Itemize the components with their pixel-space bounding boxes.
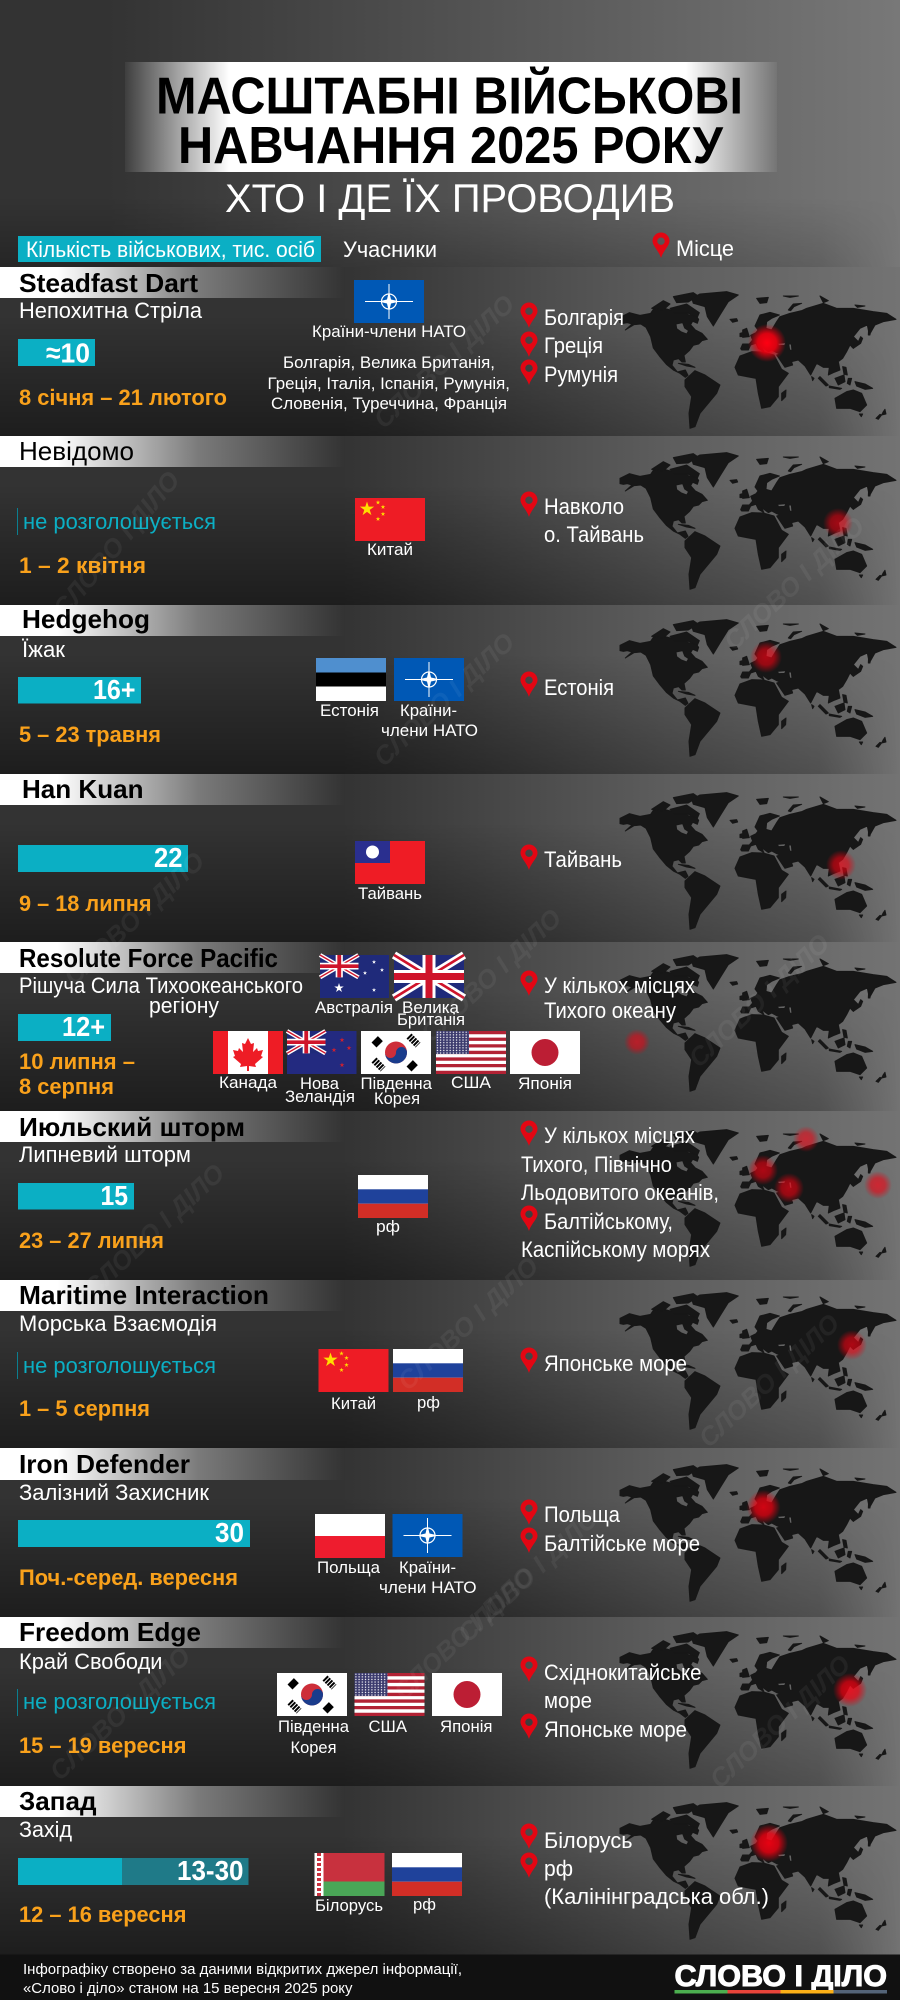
panel: Запад: Захід	[19, 1817, 72, 1842]
panel: Resolute Force Pacific: Японія	[518, 1075, 572, 1093]
watermarks: СЛОВО І ДІЛО	[682, 928, 835, 1073]
panel: Невідомо: Китай	[367, 541, 413, 559]
location: Тайвань	[544, 847, 622, 872]
panel: Maritime Interaction: рф	[417, 1394, 440, 1412]
locations	[520, 1500, 700, 1556]
flag: NATO	[354, 280, 424, 323]
flag: South Korea	[361, 1031, 431, 1074]
panel: Freedom Edge: Корея	[290, 1739, 336, 1757]
flag: Russia	[358, 1175, 428, 1218]
flag: United Kingdom	[394, 955, 464, 998]
footer: «Слово і діло» станом на 15 вересня 2025 року	[23, 1980, 353, 1997]
troop bar: 30	[215, 1517, 244, 1548]
locations: Греція	[544, 333, 603, 358]
panel: Iron Defender: Країни-	[399, 1559, 456, 1577]
world map	[620, 292, 896, 428]
heading: Resolute Force Pacific	[19, 943, 278, 973]
flag: Estonia	[316, 658, 386, 701]
locations: У кількох місцях	[544, 1123, 695, 1148]
flag: Poland	[315, 1514, 385, 1558]
heading: Freedom Edge	[19, 1617, 201, 1647]
panel: Steadfast Dart: 8 січня – 21 лютого	[19, 385, 227, 410]
locations: Білорусь	[544, 1828, 632, 1853]
panel: Maritime Interaction: 1 – 5 серпня	[19, 1396, 150, 1421]
watermarks: СЛОВО І ДІЛО	[57, 846, 210, 991]
location: Тихого океану	[544, 998, 676, 1023]
panel: Июльский шторм: 23 – 27 липня	[19, 1228, 164, 1253]
flag: Japan	[510, 1031, 580, 1074]
troop bar: 15	[100, 1180, 128, 1211]
flag: Australia	[320, 955, 389, 998]
watermarks: СЛОВО І ДІЛО	[391, 1251, 544, 1396]
world map	[620, 1293, 896, 1429]
world map	[620, 1126, 896, 1266]
locations	[520, 302, 624, 387]
watermarks	[43, 289, 870, 1794]
footer: Інфографіку створено за даними відкритих джерел інформації,	[23, 1961, 462, 1978]
world map	[620, 620, 896, 756]
watermarks: СЛОВО І ДІЛО	[414, 903, 567, 1048]
locations: Льодовитого океанів,	[521, 1180, 719, 1205]
troop bar	[18, 1517, 250, 1548]
troop bar	[18, 1855, 248, 1886]
panel: Hedgehog: члени НАТО	[381, 722, 478, 740]
world map	[620, 1632, 896, 1768]
panel: Невідомо: не розголошується	[23, 509, 216, 534]
location: Японське море	[544, 1351, 687, 1376]
panel: Resolute Force Pacific: Південна	[360, 1075, 433, 1093]
flag: Russia	[393, 1349, 463, 1392]
flag: Canada	[213, 1031, 283, 1074]
panel: Hedgehog	[0, 604, 896, 756]
locations	[520, 1120, 719, 1262]
panel: Freedom Edge: Край Свободи	[19, 1649, 162, 1674]
watermarks: СЛОВО І ДІЛО	[77, 1158, 230, 1303]
heading: Невідомо	[19, 436, 134, 466]
locations: Каспійському морях	[521, 1237, 710, 1262]
panel: Hedgehog: 5 – 23 травня	[19, 722, 161, 747]
flag: Taiwan	[355, 841, 425, 884]
flag: China	[318, 1349, 388, 1392]
legend: Місце	[676, 236, 734, 261]
panel: Han Kuan	[0, 774, 896, 929]
panel: Resolute Force Pacific: Канада	[219, 1074, 278, 1092]
watermarks: СЛОВО І ДІЛО	[717, 511, 870, 656]
troop bar	[18, 1180, 134, 1211]
locations: Японське море	[544, 1717, 687, 1742]
troop bar: 22	[154, 842, 182, 873]
panel: Steadfast Dart: Непохитна Стріла	[19, 298, 203, 323]
watermarks: СЛОВО І ДІЛО	[367, 627, 520, 772]
flag: China	[355, 498, 425, 541]
panel: Steadfast Dart: Словенія, Туреччина, Франція	[271, 395, 507, 413]
legend: Кількість військових, тис. осіб	[26, 237, 315, 262]
heading: Июльский шторм	[19, 1112, 245, 1142]
title block: МАСШТАБНІ ВІЙСЬКОВІ	[156, 66, 743, 126]
flag: USA	[354, 1673, 424, 1716]
watermarks: СЛОВО І ДІЛО	[46, 465, 186, 623]
panel: Steadfast Dart: Болгарія, Велика Британія,	[283, 354, 495, 372]
locations	[520, 1824, 769, 1909]
panel: Iron Defender: Польща	[317, 1559, 381, 1577]
panel: Freedom Edge: Японія	[440, 1718, 492, 1736]
flag: Russia	[392, 1853, 462, 1896]
panel: Июльский шторм: рф	[376, 1218, 400, 1236]
panel: Resolute Force Pacific: Австралія	[315, 999, 393, 1017]
locations: (Калінінградська обл.)	[544, 1884, 769, 1909]
panel: Resolute Force Pacific: регіону	[149, 993, 219, 1018]
panel: Resolute Force Pacific: Рішуча Сила Тихоокеанського	[19, 973, 303, 998]
heading: Hedgehog	[22, 604, 150, 634]
panel: Iron Defender: Залізний Захисник	[19, 1480, 209, 1505]
panel: Iron Defender: Поч.-серед. вересня	[19, 1565, 238, 1590]
locations: Східнокитайське	[544, 1660, 702, 1685]
panel: Iron Defender: члени НАТО	[379, 1579, 477, 1597]
panel: Maritime Interaction: Китай	[331, 1395, 376, 1413]
locations: рф	[544, 1856, 573, 1881]
panel: Hedgehog: Естонія	[320, 702, 379, 720]
panel: Resolute Force Pacific: 10 липня –	[19, 1049, 135, 1074]
location: Естонія	[544, 675, 614, 700]
location	[520, 970, 695, 1023]
troop bar	[18, 338, 95, 368]
watermarks: СЛОВО І ДІЛО	[692, 1308, 845, 1453]
location: о. Тайвань	[544, 522, 644, 547]
watermarks: СЛОВО І ДІЛО	[451, 1503, 604, 1648]
panel: Невідомо	[0, 436, 896, 589]
panel: Запад: Білорусь	[315, 1897, 383, 1915]
watermarks: СЛОВО І ДІЛО	[367, 289, 520, 434]
world map	[620, 1803, 896, 1939]
world map	[620, 1465, 896, 1601]
troop bar	[18, 674, 141, 705]
panel: Maritime Interaction: Морська Взаємодія	[19, 1311, 217, 1336]
panel: Han Kuan: Тайвань	[358, 885, 422, 903]
locations: Балтійському,	[544, 1209, 673, 1234]
locations	[520, 1656, 702, 1742]
location: Навколо	[544, 494, 624, 519]
troop bar: 16+	[93, 674, 136, 705]
location	[520, 492, 644, 547]
flag: NATO	[392, 1514, 462, 1557]
locations: море	[544, 1688, 592, 1713]
title block: НАВЧАННЯ 2025 РОКУ	[178, 117, 724, 175]
watermarks: СЛОВО І ДІЛО	[387, 1561, 540, 1706]
panel: Июльский шторм	[0, 1111, 896, 1266]
title block	[125, 62, 777, 175]
panel: Resolute Force Pacific: Корея	[374, 1090, 420, 1108]
legend: Учасники	[343, 237, 437, 262]
locations: Румунія	[544, 362, 618, 387]
troop bar: ≈10	[46, 338, 90, 368]
panel: Steadfast Dart: Країни-члени НАТО	[312, 323, 466, 341]
panel: Resolute Force Pacific	[0, 942, 896, 1108]
heading: Steadfast Dart	[19, 268, 198, 298]
panel: Freedom Edge: США	[368, 1718, 407, 1736]
locations: Тихого, Північно	[521, 1152, 672, 1177]
panel: Resolute Force Pacific: Велика	[402, 999, 460, 1017]
heading: Maritime Interaction	[19, 1280, 269, 1310]
flag: Belarus	[314, 1853, 384, 1896]
panel: Freedom Edge: Південна	[278, 1718, 350, 1736]
logo: СЛОВО І ДІЛО	[674, 1960, 887, 1993]
panel: Hedgehog: Країни-	[400, 702, 457, 720]
flag: Japan	[432, 1673, 502, 1716]
panel: Запад: 12 – 16 вересня	[19, 1902, 186, 1927]
panel: Июльский шторм: Липневий шторм	[19, 1142, 191, 1167]
panel: Maritime Interaction: не розголошується	[23, 1353, 216, 1378]
panel: Han Kuan: 9 – 18 липня	[19, 891, 152, 916]
troop bar: 13-30	[177, 1855, 244, 1886]
panel: Запад	[0, 1786, 896, 1939]
world map	[620, 955, 896, 1091]
world map	[620, 793, 896, 929]
flag: South Korea	[277, 1673, 347, 1716]
panel: Resolute Force Pacific: 8 серпня	[19, 1074, 114, 1099]
flag: USA	[436, 1031, 506, 1074]
troop bar: 12+	[62, 1011, 105, 1042]
location	[520, 672, 614, 700]
panel: Maritime Interaction	[0, 1280, 896, 1429]
panel: Freedom Edge	[0, 1617, 896, 1768]
watermarks: СЛОВО І ДІЛО	[703, 1649, 856, 1794]
panel: Невідомо: 1 – 2 квітня	[19, 553, 146, 578]
world map	[620, 453, 896, 589]
troop bar	[18, 1011, 111, 1042]
panel: Freedom Edge: 15 – 19 вересня	[19, 1733, 186, 1758]
watermarks: СЛОВО І ДІЛО	[43, 1641, 196, 1786]
flag: New Zealand	[287, 1031, 356, 1074]
panel: Resolute Force Pacific: США	[451, 1074, 491, 1092]
legend	[18, 232, 734, 262]
location	[520, 844, 622, 872]
footer	[0, 1954, 900, 2000]
panel: Resolute Force Pacific: Британія	[397, 1011, 465, 1029]
flag: NATO	[394, 658, 464, 701]
troop bar	[18, 842, 188, 873]
subtitle: ХТО І ДЕ ЇХ ПРОВОДИВ	[225, 177, 675, 221]
locations: Польща	[544, 1502, 621, 1527]
panel: Запад: рф	[413, 1896, 436, 1914]
panel: Steadfast Dart	[0, 267, 896, 428]
heading: Запад	[19, 1786, 97, 1816]
heading: Iron Defender	[19, 1449, 190, 1479]
panel: Steadfast Dart: Греція, Італія, Іспанія, Румунія,	[268, 375, 510, 393]
locations: Болгарія	[544, 305, 624, 330]
heading: Han Kuan	[22, 774, 144, 804]
location: У кількох місцях	[544, 973, 695, 998]
panel: Hedgehog: Їжак	[22, 637, 65, 662]
panel: Resolute Force Pacific: Нова	[300, 1075, 340, 1093]
panel: Resolute Force Pacific: Зеландія	[285, 1088, 355, 1106]
panel: Iron Defender	[0, 1448, 896, 1601]
locations: Балтійське море	[544, 1531, 700, 1556]
panel: Freedom Edge: не розголошується	[23, 1689, 216, 1714]
